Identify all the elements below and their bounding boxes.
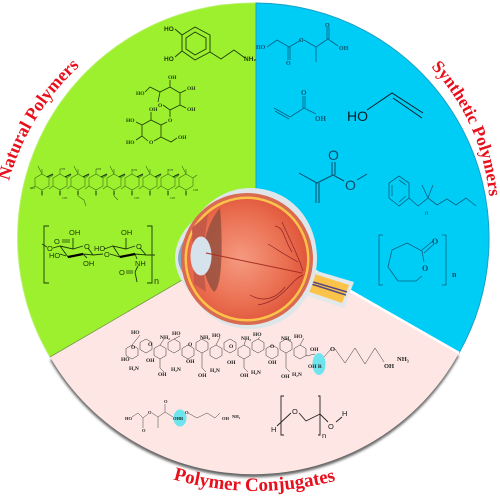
molecule: small conjugate: O: [164, 399, 168, 404]
molecule: dopamine: NH₂: [244, 56, 256, 63]
molecule: long conjugate: O: [148, 342, 153, 348]
molecule: long conjugate: HO: [131, 330, 140, 336]
molecule: long conjugate: HO: [172, 331, 181, 337]
molecule: PEG: [271, 396, 347, 440]
molecule: polysaccharide chain: OH: [134, 196, 140, 200]
molecule: PLGA: O: [325, 23, 330, 29]
ciliary body: [203, 208, 222, 292]
molecule: long conjugate: NH₂: [281, 336, 291, 342]
molecule: polysaccharide chain: [30, 166, 199, 206]
molecule: methyl methacrylate: O: [328, 147, 339, 163]
molecule: small conjugate: HO: [125, 416, 133, 421]
molecule: long conjugate: OH: [158, 372, 167, 378]
molecule: disaccharide: [126, 75, 196, 146]
molecule: disaccharide: OH: [178, 135, 187, 141]
molecule: small conjugate: OHR: [173, 416, 184, 421]
molecule: alkyl benzene: [389, 176, 476, 217]
molecule: disaccharide: OH: [168, 75, 177, 81]
panel: synthetic polymers: [256, 3, 489, 353]
molecule: caprolactone: n: [452, 270, 457, 279]
molecule: acrylic acid: [274, 89, 326, 123]
molecule: polysaccharide chain: NH: [60, 167, 66, 171]
molecule: disaccharide: HO: [126, 140, 135, 146]
molecule: polysaccharide chain: NH: [132, 168, 138, 172]
molecule: long conjugate: OH: [186, 359, 195, 365]
molecule: long conjugate: NH₂: [241, 336, 251, 342]
molecule: PLGA: OH: [339, 46, 349, 52]
molecule: long conjugate: HO: [253, 332, 262, 338]
molecule: disaccharide: O: [149, 140, 154, 146]
molecule: long conjugate: NH₂: [160, 335, 170, 341]
molecule: long conjugate: H₂N: [171, 367, 181, 373]
panel: natural polymers: [18, 3, 256, 357]
molecule: long conjugate: OH: [281, 374, 290, 380]
molecule: disaccharide: O: [168, 118, 173, 124]
molecule: hyaluronic acid: OH: [121, 228, 132, 237]
molecule: alkyl benzene: n: [425, 211, 428, 217]
molecule: small conjugate: NH₂: [232, 414, 241, 419]
molecule: dopamine: HO: [164, 26, 174, 33]
molecule: PLGA: HO: [256, 45, 266, 51]
sclera: [175, 188, 317, 329]
molecule: long conjugate: OH: [227, 360, 236, 366]
molecule: long conjugate: OH R: [308, 364, 323, 370]
molecule: dopamine: [164, 26, 256, 63]
molecule: hyaluronic acid: O: [136, 242, 142, 251]
optic nerve: [296, 266, 354, 308]
molecule: long conjugate: O: [188, 342, 193, 348]
molecule: polysaccharide chain: OH: [170, 196, 176, 200]
molecule: disaccharide: OH: [187, 86, 196, 92]
molecule: polysaccharide chain: NH: [96, 167, 102, 171]
molecule: long conjugate: OH: [198, 373, 207, 379]
molecule: hyaluronic acid: O: [119, 268, 125, 277]
molecule: PEG: H: [271, 425, 276, 434]
lens: [190, 236, 212, 276]
molecule: small conjugate: OH: [222, 416, 230, 421]
molecule: polysaccharide chain: OH: [193, 188, 199, 192]
molecule: long conjugate: H₂N: [251, 370, 261, 376]
molecule: hyaluronic acid: [42, 226, 159, 286]
molecule: disaccharide: OH: [187, 107, 196, 113]
molecule: long conjugate: NH₂: [200, 335, 210, 341]
molecule: caprolactone: [379, 235, 457, 285]
molecule: long conjugate: H₂N: [292, 372, 302, 378]
molecule: long conjugate: OH: [146, 358, 155, 364]
molecule: PEG: O: [328, 422, 334, 431]
molecule: acrylic acid: O: [301, 89, 307, 97]
molecule: PEG: n: [322, 431, 326, 440]
molecule: long conjugate: OH: [268, 360, 277, 366]
molecule: hyaluronic acid: O: [104, 250, 110, 259]
molecule: long conjugate: [121, 330, 409, 380]
molecule: caprolactone: O: [422, 264, 428, 273]
heading: Polymer Conjugates: Polymer Conjugates: [174, 467, 335, 494]
molecule: polysaccharide chain: OH: [62, 196, 68, 200]
molecule: long conjugate: OH: [384, 363, 394, 370]
molecule: small conjugate: [125, 399, 241, 433]
molecule: long conjugate: H₂N: [210, 368, 220, 374]
molecule: PEG: O: [292, 407, 298, 416]
molecule: hyaluronic acid: NH: [135, 259, 146, 268]
molecule: long conjugate: O: [270, 344, 275, 350]
molecule: long conjugate: NH₃: [397, 356, 409, 363]
molecule: hyaluronic acid: n: [154, 276, 159, 286]
molecule: PEG: H: [342, 409, 347, 418]
molecule: hyaluronic acid: O: [54, 237, 60, 246]
molecule: PLGA: [256, 23, 349, 67]
molecule: hyaluronic acid: O: [84, 242, 90, 251]
molecule: PLGA: O: [299, 38, 304, 44]
callout: cyan linker R: [312, 353, 326, 375]
molecule: long conjugate: HO: [121, 357, 130, 363]
molecule: dopamine: HO: [164, 56, 174, 63]
molecule: polysaccharide chain: NH: [168, 168, 174, 172]
retina: [181, 193, 313, 325]
molecule: caprolactone: O: [432, 237, 438, 246]
icon: eye: [175, 188, 354, 329]
molecule: hyaluronic acid: OH: [83, 259, 94, 268]
molecule: methyl methacrylate: O: [345, 177, 356, 193]
molecule: long conjugate: OH: [310, 347, 319, 353]
molecule: disaccharide: HO: [126, 118, 135, 124]
molecule: disaccharide: O: [158, 103, 163, 109]
molecule: small conjugate: O: [142, 428, 146, 433]
molecule: hyaluronic acid: O: [47, 244, 53, 253]
molecule: long conjugate: O: [229, 344, 234, 350]
molecule: long conjugate: O: [131, 345, 136, 351]
molecule: long conjugate: O: [330, 346, 335, 353]
blood vessels: [206, 222, 303, 305]
panel: polymer conjugates: [50, 237, 459, 474]
molecule: hyaluronic acid: OH: [69, 228, 80, 237]
molecule: disaccharide: OH: [149, 107, 158, 113]
molecule: hyaluronic acid: HO: [94, 244, 105, 253]
molecule: long conjugate: H₂N: [129, 366, 139, 372]
molecule: vinyl alcohol: [347, 93, 423, 124]
molecule: long conjugate: OH: [240, 373, 249, 379]
molecule: PLGA: O: [286, 61, 291, 67]
molecule: long conjugate: HO: [212, 333, 221, 339]
molecule: acrylic acid: OH: [315, 115, 326, 123]
molecule: long conjugate: HO: [294, 334, 303, 340]
molecule: hyaluronic acid: HO: [49, 251, 60, 260]
molecule: small conjugate: O: [185, 410, 189, 415]
molecule: polysaccharide chain: HO: [30, 186, 36, 190]
molecule: methyl methacrylate: [299, 147, 367, 203]
molecule: small conjugate: O: [148, 410, 152, 415]
molecule: vinyl alcohol: HO: [347, 108, 368, 124]
pie shadow: [50, 240, 459, 477]
molecule: disaccharide: HO: [136, 91, 145, 97]
